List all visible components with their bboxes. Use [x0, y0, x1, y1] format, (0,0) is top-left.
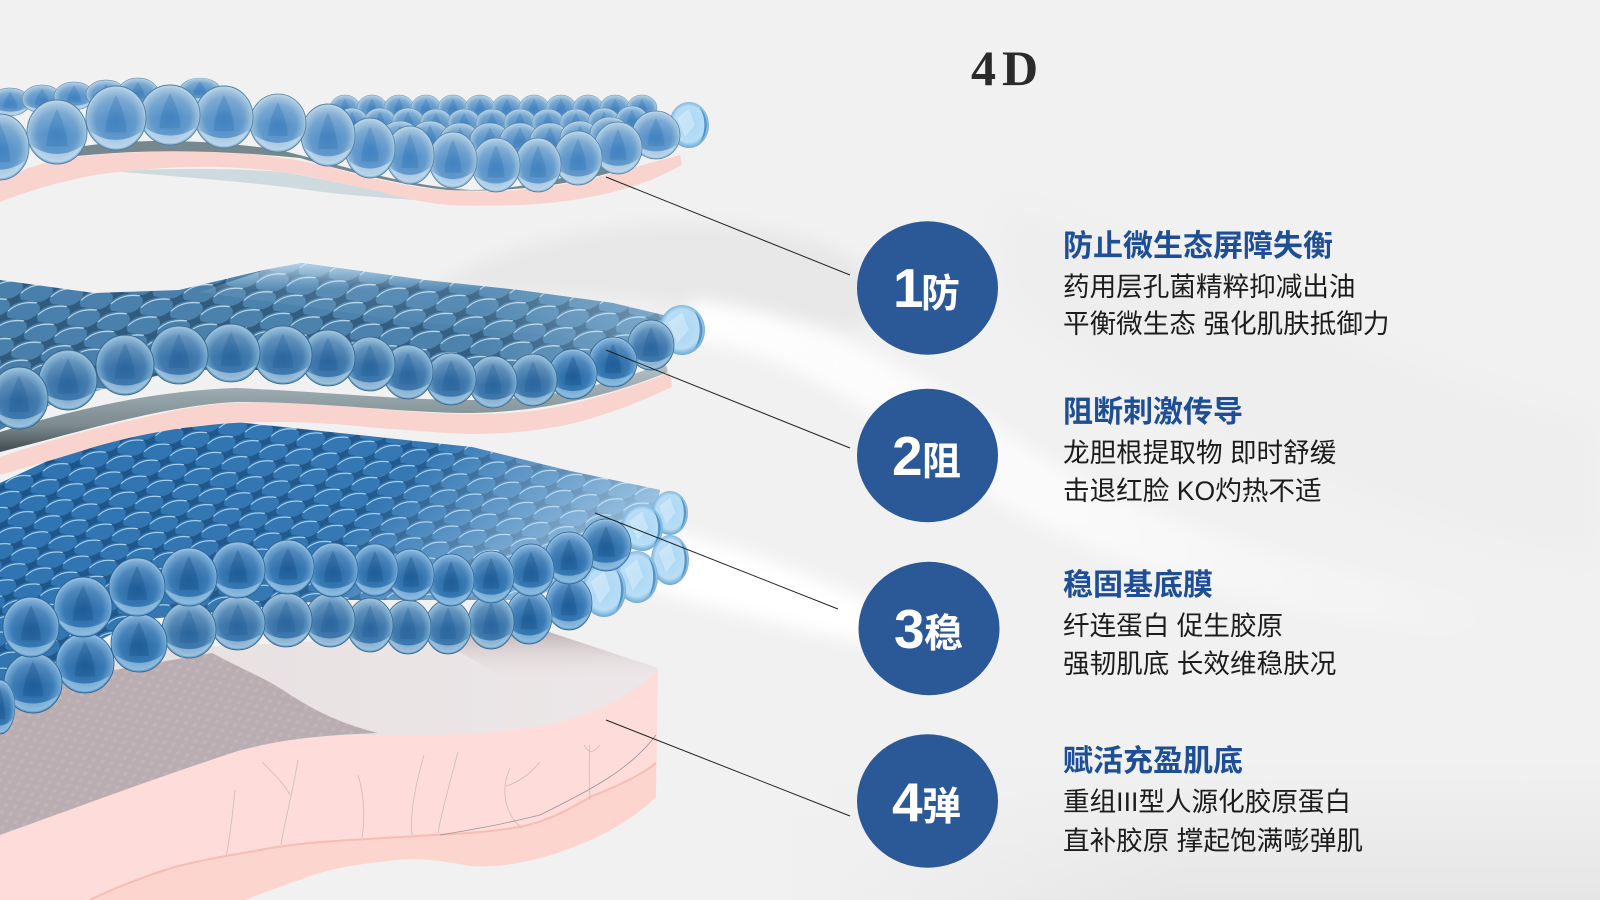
text block 2: 击退红脸 KO灼热不适	[1063, 476, 1322, 506]
text block 4: 直补胶原 撑起饱满嘭弹肌	[1063, 826, 1363, 856]
leader line 2	[606, 350, 850, 448]
text block 2	[1063, 396, 1336, 506]
text block 2: 阻断刺激传导	[1063, 396, 1243, 429]
badge 1: 1	[893, 257, 924, 319]
text block 3	[1063, 569, 1336, 679]
skin top surface	[0, 630, 658, 835]
bead mosaic	[0, 422, 660, 690]
text block 1: 药用层孔菌精粹抑减出油	[1063, 272, 1356, 302]
text block 1: 平衡微生态 强化肌肤抵御力	[1063, 309, 1390, 339]
layer 1 underside shadow	[108, 169, 430, 201]
shadow with dotted texture	[0, 653, 378, 835]
layer 1 back bead rows	[0, 78, 657, 157]
upper bead row	[3, 491, 688, 657]
text block 4: 重组III型人源化胶原蛋白	[1063, 787, 1351, 817]
dermis cracks	[226, 735, 656, 856]
lower bead row	[0, 535, 689, 734]
badge 2	[857, 389, 998, 522]
leader line 4	[606, 720, 850, 816]
text block 4	[1063, 745, 1363, 856]
layer 1: single bead layer	[0, 78, 709, 206]
layer 1 grey film	[60, 141, 650, 190]
layer 2 bead mosaic	[0, 263, 684, 430]
layer 4: skin base	[0, 630, 658, 900]
badge 4: 4	[892, 771, 923, 833]
text block 1	[1063, 230, 1390, 339]
badge 2: 2	[892, 425, 923, 487]
skin side face	[0, 668, 658, 900]
text block 1: 防止微生态屏障失衡	[1063, 230, 1333, 263]
leader line 3	[595, 513, 838, 609]
text block 3: 纤连蛋白 促生胶原	[1063, 611, 1283, 641]
text block 4: 赋活充盈肌底	[1063, 745, 1243, 778]
layer 2: bead layer with film	[0, 263, 705, 475]
badge 4: 弹	[922, 786, 961, 829]
text block 3: 稳固基底膜	[1063, 569, 1213, 602]
badge 3	[858, 562, 1000, 695]
badge 4	[857, 734, 998, 868]
badge 3: 稳	[924, 613, 963, 656]
text block 3: 强韧肌底 长效维稳肤况	[1063, 649, 1336, 679]
layer 2 front bead row	[0, 305, 705, 429]
layer 1 pink base	[0, 151, 682, 206]
layer 2 pink base	[0, 372, 672, 475]
badge 1: 防	[921, 273, 960, 316]
layer 3: dense bead layer	[0, 422, 689, 734]
leader line 1	[606, 177, 850, 275]
badge 2: 阻	[922, 441, 961, 484]
layer 1 front bead row	[0, 85, 709, 192]
badge 3: 3	[894, 598, 925, 660]
text block 2: 龙胆根提取物 即时舒缓	[1063, 438, 1336, 468]
title: 4D	[971, 40, 1044, 96]
layer 2 grey film	[0, 362, 668, 452]
badge 1	[857, 221, 998, 355]
